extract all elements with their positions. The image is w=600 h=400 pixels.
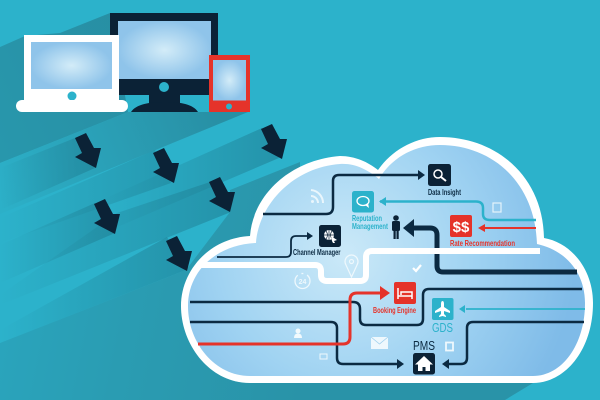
- devices: [16, 13, 250, 112]
- arrows pointing to cloud: [75, 124, 287, 271]
- rate recommendation: Rate Recommendation: [450, 239, 515, 248]
- person icon: [392, 215, 400, 239]
- laptop: [16, 35, 128, 112]
- PMS: PMS: [413, 338, 435, 353]
- channel manager: Channel Manager: [293, 248, 340, 257]
- rate recommendation: $$: [453, 219, 470, 236]
- GDS: [432, 298, 454, 335]
- icon: location pin: [345, 255, 358, 277]
- PMS: [413, 338, 435, 374]
- arrowheads: [307, 170, 485, 369]
- icon: check: [413, 265, 421, 271]
- icon: 24 hours: 24: [299, 279, 306, 286]
- reputation management: Reputation: [352, 213, 382, 223]
- icon: small mail: [320, 354, 327, 359]
- GDS: GDS: [432, 320, 453, 335]
- cloud outline: [181, 137, 593, 383]
- cloud interior: [188, 145, 585, 376]
- small white icons: [294, 190, 501, 359]
- channel manager: [293, 225, 341, 257]
- tablet: [209, 55, 250, 112]
- icon: user: [294, 328, 302, 338]
- long shadows of devices and arrows: [0, 13, 279, 343]
- icon: 24 hours: [295, 274, 310, 288]
- cloud shadow: [0, 162, 533, 400]
- data insight: Data Insight: [428, 188, 461, 197]
- icon: wifi: [311, 190, 323, 203]
- data insight: [428, 164, 461, 197]
- connector lines: [190, 175, 585, 364]
- monitor: [110, 13, 218, 112]
- booking engine: Booking Engine: [373, 306, 416, 315]
- rate recommendation: [450, 215, 515, 248]
- cloud: [181, 137, 593, 383]
- booking engine: [373, 282, 416, 315]
- white divider band: [198, 251, 540, 281]
- icon: tablet: [446, 342, 453, 350]
- reputation management: Management: [352, 221, 388, 231]
- icon: envelope: [371, 337, 388, 349]
- reputation management: [352, 191, 388, 231]
- icon: document: [493, 203, 501, 212]
